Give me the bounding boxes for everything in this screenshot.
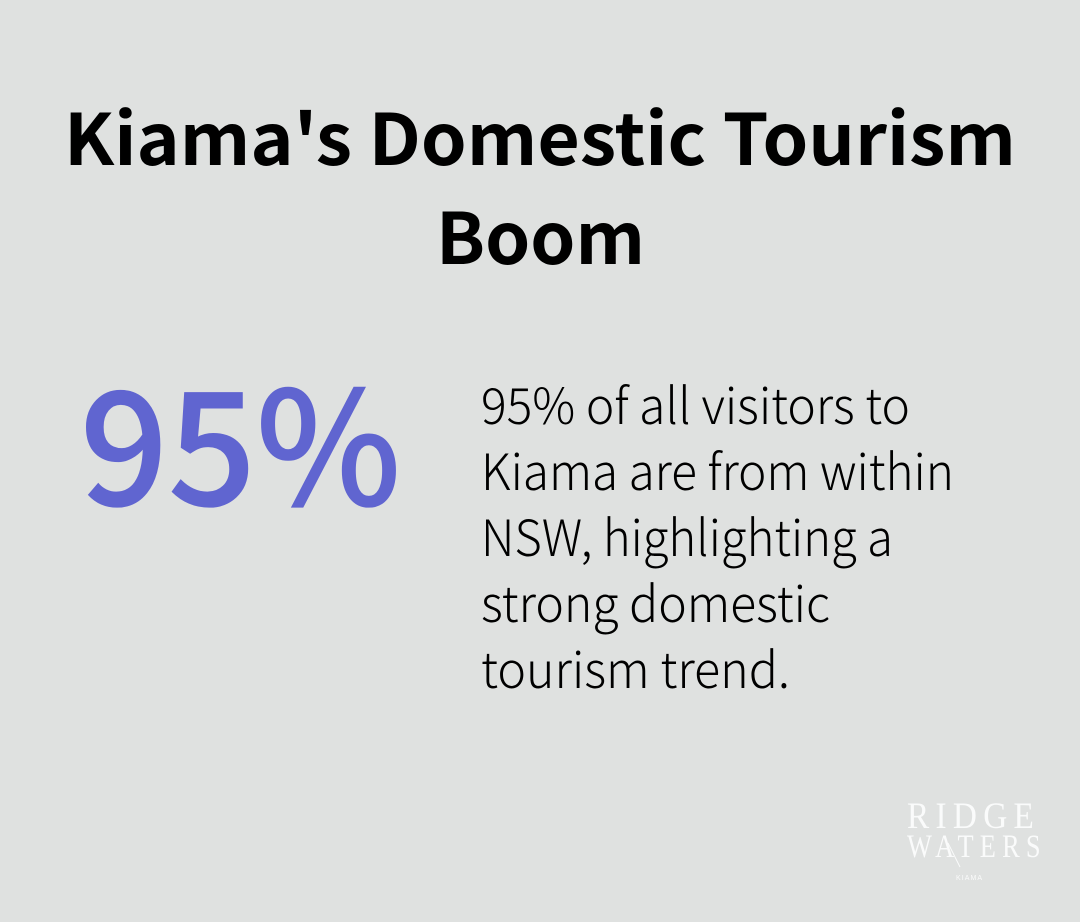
description text: tourism trend. — [481, 631, 790, 703]
title — [64, 84, 1016, 285]
description text: Kiama are from within — [481, 433, 954, 505]
description text: 95% of all visitors to — [481, 367, 910, 439]
logo: Ridge Waters Kiama — [907, 795, 1041, 882]
description text — [481, 367, 954, 703]
logo: Ridge Waters Kiama: KIAMA — [956, 875, 982, 882]
big statistic: 95%: 95% — [80, 324, 401, 551]
logo: Ridge Waters Kiama: WATERS — [907, 828, 1041, 865]
description text: strong domestic — [481, 565, 830, 637]
title: Boom — [436, 183, 645, 285]
logo: Ridge Waters Kiama: RIDGE — [907, 795, 1034, 836]
description text: NSW, highlighting a — [481, 499, 893, 571]
title: Kiama's Domestic Tourism — [64, 84, 1016, 186]
